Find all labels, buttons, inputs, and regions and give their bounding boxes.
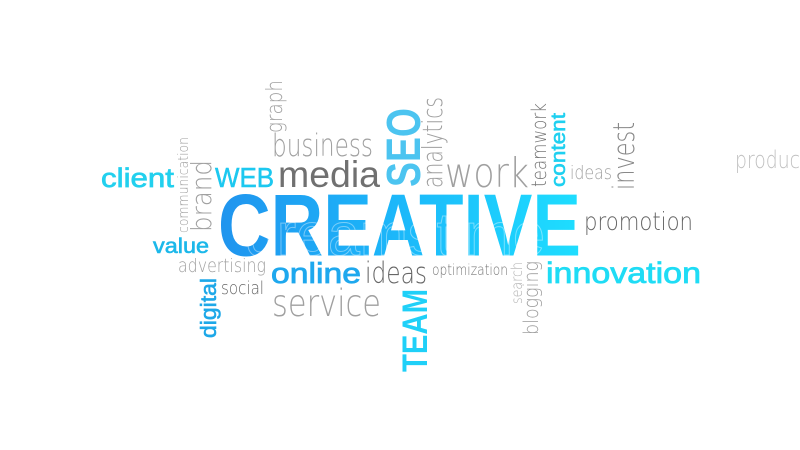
word: TEAM: TEAM: [396, 289, 435, 372]
word: promotion: promotion: [584, 207, 693, 236]
word: optimization: optimization: [432, 261, 508, 279]
word: graph: graph: [263, 80, 288, 133]
word: WEB: WEB: [215, 162, 274, 193]
word: innovation: innovation: [546, 257, 701, 290]
word: search: search: [508, 262, 526, 304]
word: invest: invest: [607, 122, 641, 190]
word: analytics: analytics: [416, 97, 449, 188]
word: blogging: blogging: [519, 261, 543, 335]
word: digital: digital: [196, 278, 221, 338]
watermark: dreamstime: [245, 201, 545, 268]
word: social: social: [221, 278, 264, 299]
word: value: value: [153, 235, 209, 258]
word: brand: brand: [185, 160, 218, 232]
word: online: online: [271, 258, 361, 290]
word: ideas lower: ideas: [365, 256, 427, 290]
word: teamwork: teamwork: [527, 103, 551, 187]
word: advertising: advertising: [178, 255, 266, 277]
word: content: content: [548, 113, 570, 187]
word: business: business: [272, 128, 373, 164]
word: communication: communication: [176, 137, 192, 233]
word: service: service: [272, 282, 381, 325]
title word: CREATIVE: CREATIVE: [218, 176, 581, 274]
word: work: work: [445, 149, 529, 197]
word: media: media: [278, 154, 380, 195]
word: ideas upper: ideas: [570, 162, 612, 184]
word: SEO: SEO: [378, 108, 431, 187]
word: client: client: [101, 163, 175, 193]
